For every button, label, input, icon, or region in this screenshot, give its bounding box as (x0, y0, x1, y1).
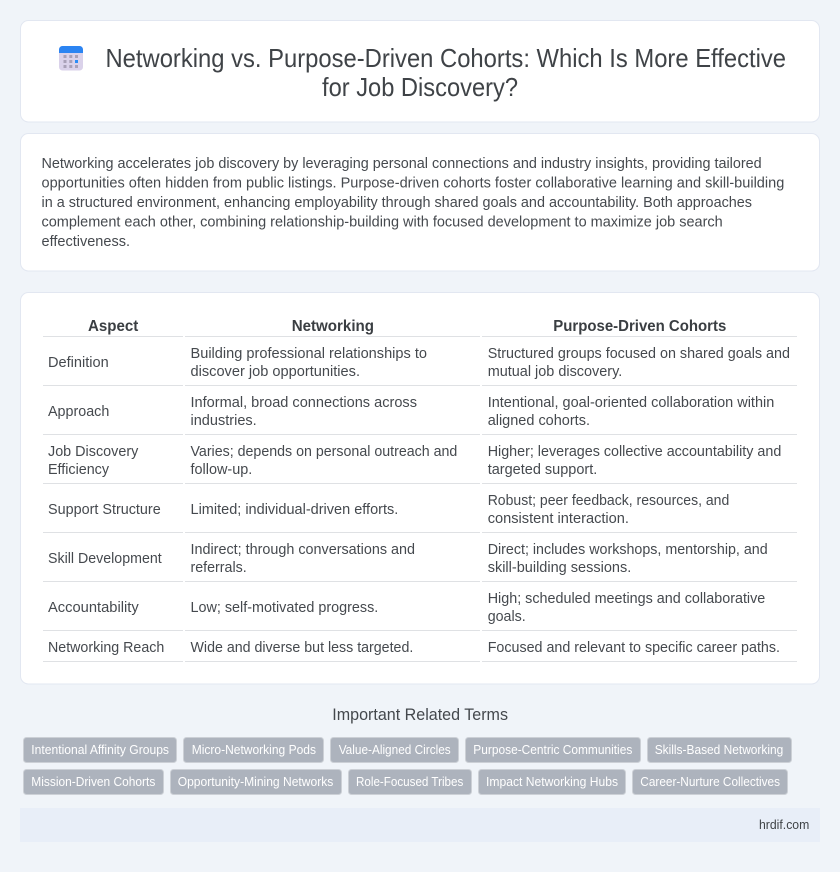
tag: Intentional Affinity Groups (24, 738, 176, 762)
panel: related term tags (24, 738, 792, 794)
row: accountability: Accountability (48, 600, 139, 616)
row: accountability: High; scheduled meetings and collaborative (488, 591, 765, 607)
row: skill development: Direct; includes workshops, mentorship, and (488, 542, 768, 558)
row: definition: Definition (48, 355, 109, 371)
row: definition: Building professional relationships to (190, 346, 427, 362)
text block: introduction: effectiveness. (42, 233, 130, 250)
table header: Networking (292, 318, 374, 335)
tag: Intentional Affinity Groups: Intentional Affinity Groups (31, 742, 169, 757)
panel: header (20, 20, 820, 122)
row: skill development: Skill Development (48, 551, 162, 567)
row: definition: mutual job discovery. (488, 364, 622, 380)
row: definition (48, 346, 790, 380)
row: accountability: Low; self-motivated progress. (190, 600, 378, 616)
row: accountability (48, 591, 765, 625)
row: support structure: Support Structure (48, 502, 161, 518)
table row lines (43, 336, 797, 662)
tag: Micro-Networking Pods (184, 738, 324, 762)
row: job discovery efficiency: follow-up. (190, 462, 252, 478)
tag: Role-Focused Tribes (348, 770, 472, 794)
row: job discovery efficiency: Efficiency (48, 462, 110, 478)
tag: Opportunity-Mining Networks: Opportunity-Mining Networks (178, 774, 333, 789)
row: approach: Intentional, goal-oriented collaboration within (488, 395, 774, 411)
panel: introduction (20, 134, 820, 271)
row: approach: Informal, broad connections across (190, 395, 417, 411)
row: job discovery efficiency: Higher; leverages collective accountability and (488, 444, 781, 460)
tag: Purpose-Centric Communities (466, 738, 640, 762)
title: Networking vs. Purpose-Driven Cohorts: Which Is More Effective (106, 45, 786, 73)
text block: introduction: in a structured environment, enhancing employability through shared goals and accountability. Both approaches (42, 194, 752, 211)
row: support structure (48, 493, 729, 527)
tag: Opportunity-Mining Networks (170, 770, 342, 794)
tag: Career-Nurture Collectives (632, 770, 788, 794)
row: job discovery efficiency: Job Discovery (48, 444, 139, 460)
row: job discovery efficiency: targeted support. (488, 462, 597, 478)
row: job discovery efficiency (48, 444, 781, 478)
tag: Skills-Based Networking (648, 738, 792, 762)
row: skill development: skill-building sessions. (488, 560, 631, 576)
text block: introduction: Networking accelerates job discovery by leveraging personal connections and industry insights, providing tailored (42, 155, 762, 172)
row: approach: industries. (190, 413, 257, 429)
table header: Purpose-Driven Cohorts (553, 318, 726, 335)
row: definition: Structured groups focused on shared goals and (488, 346, 790, 362)
row: job discovery efficiency: Varies; depends on personal outreach and (190, 444, 457, 460)
tag: Micro-Networking Pods: Micro-Networking Pods (192, 742, 316, 757)
title: for Job Discovery? (322, 74, 518, 102)
footer: hrdif.com (759, 817, 809, 832)
tag: Skills-Based Networking: Skills-Based Networking (655, 742, 783, 757)
row: networking reach: Networking Reach (48, 640, 164, 656)
panel: comparison table (20, 292, 820, 684)
tag: Value-Aligned Circles: Value-Aligned Circles (339, 742, 451, 757)
tag: Mission-Driven Cohorts: Mission-Driven Cohorts (31, 774, 155, 789)
footer (20, 808, 820, 842)
tag: Purpose-Centric Communities: Purpose-Centric Communities (473, 742, 632, 757)
table header: Aspect (88, 318, 138, 335)
tag: Impact Networking Hubs: Impact Networking Hubs (486, 774, 618, 789)
row: approach (48, 395, 774, 429)
text block: introduction: complement each other, combining relationship-building with focused development to maximize job search (42, 214, 723, 230)
text block: introduction (42, 155, 784, 250)
title (106, 45, 786, 102)
row: accountability: goals. (488, 609, 526, 625)
row: skill development (48, 542, 768, 576)
heading: important related terms: Important Related Terms (332, 706, 508, 724)
row: networking reach (48, 640, 780, 656)
row: support structure: Limited; individual-driven efforts. (190, 502, 398, 518)
row: approach: aligned cohorts. (488, 413, 590, 429)
tag: Mission-Driven Cohorts (24, 770, 164, 794)
text block: introduction: opportunities often hidden from public listings. Purpose-driven cohorts foster collaborative learning and skill-building (42, 174, 784, 192)
tag: Impact Networking Hubs (478, 770, 626, 794)
row: approach: Approach (48, 404, 109, 420)
row: support structure: consistent interaction. (488, 511, 629, 527)
row: support structure: Robust; peer feedback, resources, and (488, 493, 729, 509)
row: networking reach: Focused and relevant to specific career paths. (488, 640, 780, 656)
row: skill development: referrals. (190, 560, 247, 576)
row: definition: discover job opportunities. (190, 364, 360, 380)
table header (88, 318, 726, 335)
tag: Value-Aligned Circles (330, 738, 458, 762)
row: networking reach: Wide and diverse but less targeted. (190, 640, 413, 656)
row: skill development: Indirect; through conversations and (190, 542, 415, 558)
tag: Role-Focused Tribes: Role-Focused Tribes (356, 774, 463, 789)
tag: Career-Nurture Collectives: Career-Nurture Collectives (640, 774, 780, 789)
icon: calendar (59, 46, 83, 70)
